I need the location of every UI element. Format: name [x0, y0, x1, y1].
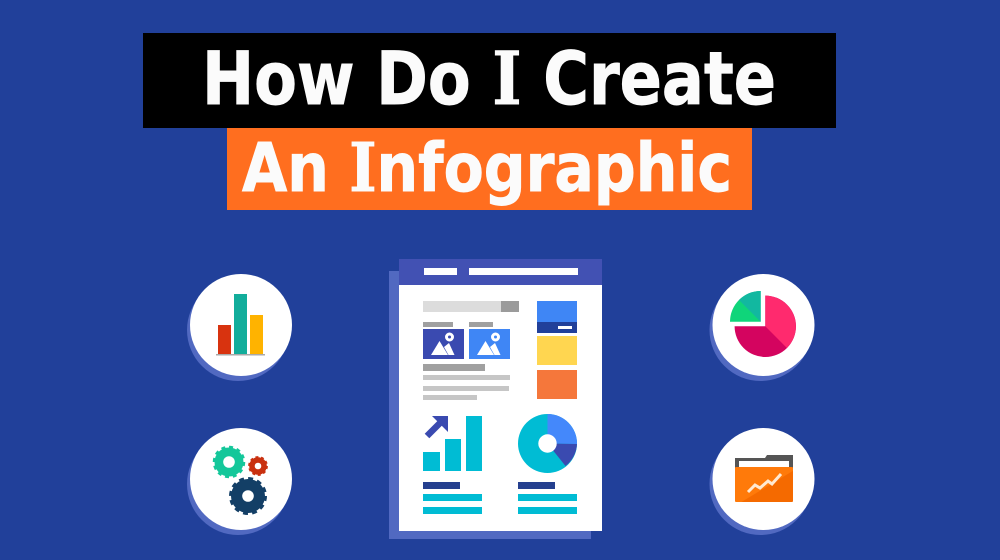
- image card: light blue: [469, 322, 510, 359]
- text lines: [423, 364, 510, 400]
- mini donut chart: [518, 414, 577, 473]
- colour swatches: [537, 301, 577, 399]
- heading bar: [423, 301, 519, 312]
- document shadow: [389, 271, 591, 539]
- panel: document illustration: [389, 259, 602, 539]
- document header: [399, 259, 602, 285]
- icon: pie chart badge: [710, 274, 814, 381]
- title: second line: An Infographic: [242, 128, 732, 207]
- icon: gears badge: [187, 428, 292, 535]
- image card: dark blue: [423, 322, 464, 359]
- document page: [399, 285, 602, 531]
- icon: bar chart badge: [187, 274, 292, 381]
- title: first line: How Do I Create: [202, 36, 776, 122]
- chart captions: [423, 482, 577, 514]
- icon: folder badge: [710, 428, 814, 535]
- mini bar chart with arrow: [423, 416, 482, 471]
